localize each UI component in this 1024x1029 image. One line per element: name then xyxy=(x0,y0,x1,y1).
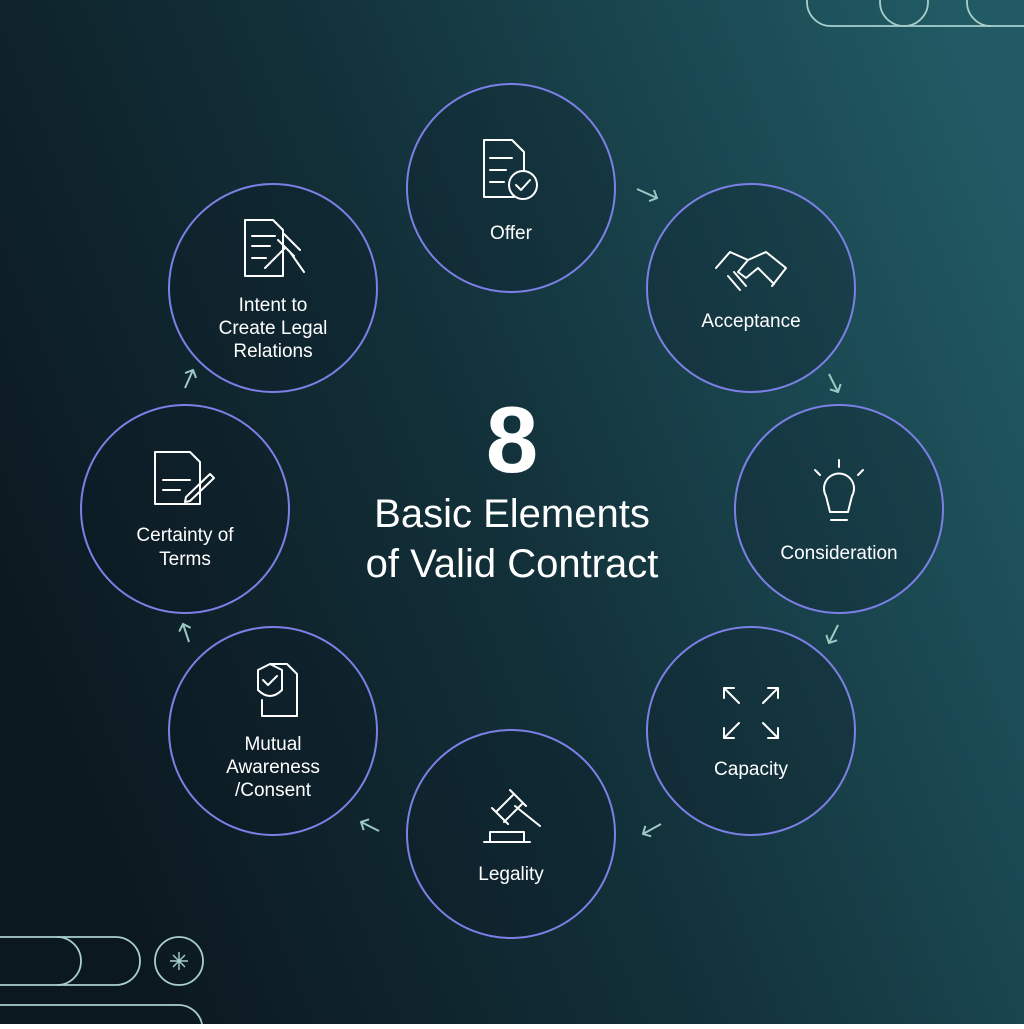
labels: Relations xyxy=(233,341,313,362)
labels: Certainty of xyxy=(136,525,234,546)
circles xyxy=(81,84,943,938)
labels: /Consent xyxy=(235,780,312,801)
labels xyxy=(136,223,898,885)
labels: Intent to xyxy=(239,295,307,316)
labels: Terms xyxy=(159,549,211,570)
labels: Offer xyxy=(490,223,533,244)
icons xyxy=(155,140,863,842)
arrows xyxy=(183,189,838,834)
labels: Acceptance xyxy=(701,311,801,332)
labels: Consideration xyxy=(780,543,898,564)
labels: Create Legal xyxy=(219,318,327,339)
center title: 8 xyxy=(486,387,538,492)
center title: Basic Elements xyxy=(374,492,650,536)
labels: Mutual xyxy=(244,734,302,755)
labels: Awareness xyxy=(226,757,320,778)
center title xyxy=(366,387,658,586)
labels: Legality xyxy=(478,864,544,885)
center title: of Valid Contract xyxy=(366,542,658,586)
labels: Capacity xyxy=(714,759,788,780)
